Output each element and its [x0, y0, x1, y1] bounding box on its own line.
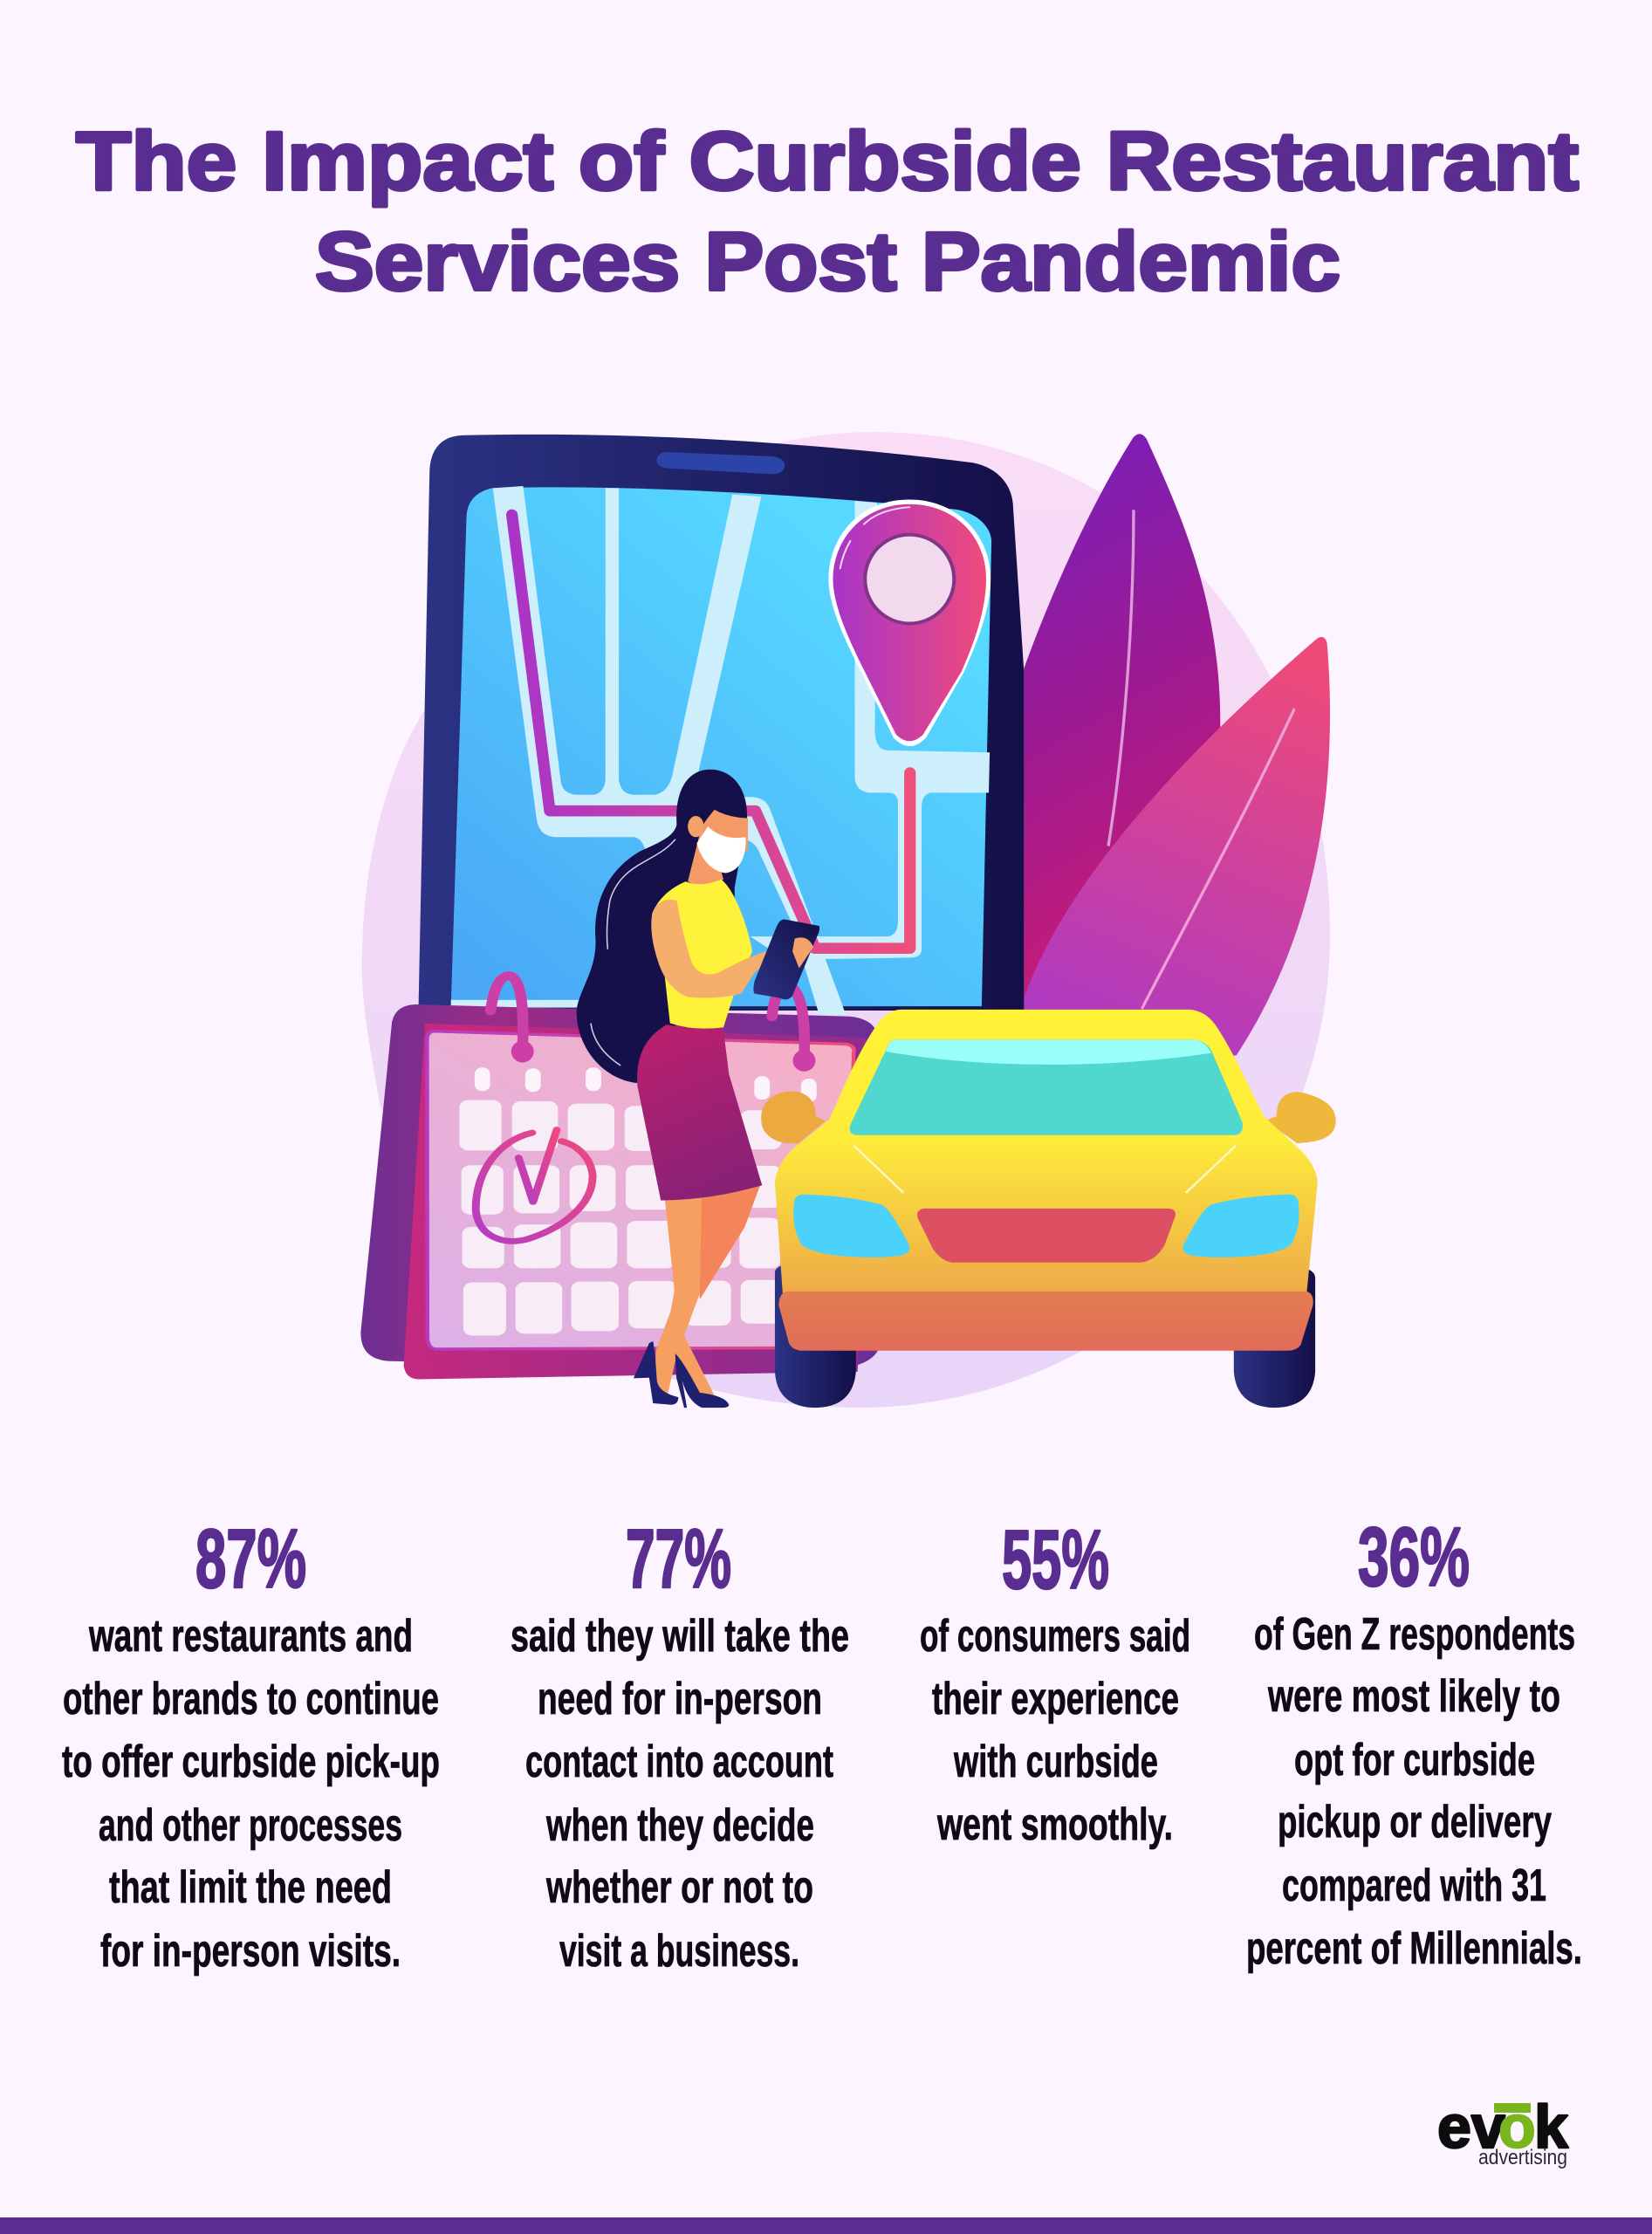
description	[62, 1611, 440, 1977]
windshield	[850, 1039, 1243, 1135]
description	[920, 1611, 1190, 1850]
skirt	[637, 1024, 762, 1201]
title	[76, 115, 1579, 308]
stat: 55%	[920, 1513, 1190, 1850]
left mirror	[761, 1091, 826, 1143]
check mark in circle	[476, 1130, 593, 1241]
logo wordmark: o	[1498, 2093, 1536, 2161]
windshield highlight	[886, 1039, 1211, 1065]
stat: 36%	[1246, 1511, 1582, 1974]
purple leaf	[1024, 434, 1222, 1011]
pink leaf vein	[1141, 709, 1294, 1009]
number 36%: 36%	[1358, 1511, 1470, 1604]
number 87%: 87%	[195, 1512, 306, 1606]
bottom bar	[0, 2217, 1652, 2234]
car body	[775, 1010, 1318, 1293]
hair, face, torso	[577, 770, 819, 1083]
right wheel	[1234, 1270, 1315, 1408]
description: when they decide	[545, 1800, 814, 1851]
tablet body	[418, 435, 1024, 1011]
calendar binding holes	[475, 1067, 817, 1102]
description: to offer curbside pick-up	[62, 1737, 440, 1787]
description: whether or not to	[545, 1862, 813, 1913]
ear	[688, 816, 704, 837]
left headlight	[793, 1195, 909, 1257]
skirt, legs, shoes	[634, 1024, 762, 1408]
background blob	[362, 432, 1330, 1408]
logo: evok advertising	[1437, 2093, 1568, 2169]
description: opt for curbside	[1294, 1735, 1535, 1785]
title: Services Post Pandemic	[315, 216, 1340, 308]
location pin	[828, 499, 991, 746]
grille	[917, 1209, 1176, 1263]
description: visit a business.	[559, 1926, 799, 1977]
right headlight	[1182, 1195, 1299, 1257]
right mirror	[1265, 1092, 1336, 1143]
hair	[577, 770, 747, 1083]
title: The Impact of Curbside Restaurant	[76, 115, 1579, 208]
description: want restaurants and	[88, 1611, 413, 1662]
tablet screen	[451, 487, 991, 1006]
woman with mask holding phone	[577, 770, 819, 1408]
pink leaf	[1024, 637, 1330, 1055]
calendar page	[427, 1031, 854, 1349]
calendar frame	[404, 1024, 877, 1379]
legs	[655, 1197, 716, 1401]
face and neck	[688, 810, 748, 885]
description: their experience	[932, 1674, 1179, 1724]
description: need for in-person	[538, 1674, 822, 1724]
description	[1246, 1609, 1582, 1974]
logo bar over o	[1494, 2103, 1531, 2113]
bumper	[778, 1292, 1313, 1351]
stat: 77%	[511, 1512, 849, 1977]
logo wordmark: k	[1534, 2093, 1568, 2161]
description: said they will take the	[511, 1611, 849, 1662]
calendar date cells	[459, 1100, 782, 1335]
hood lines	[854, 1146, 1236, 1193]
calendar	[360, 976, 878, 1379]
description: for in-person visits.	[100, 1926, 401, 1977]
logo wordmark: ev	[1437, 2093, 1505, 2161]
logo subtitle: advertising	[1478, 2146, 1567, 2169]
handheld phone	[753, 920, 819, 999]
number 77%: 77%	[626, 1512, 731, 1606]
description: with curbside	[953, 1737, 1158, 1787]
calendar ring knobs	[511, 1041, 815, 1072]
tablet map	[418, 435, 1024, 1015]
back leg	[696, 1185, 760, 1299]
tablet notch	[656, 452, 785, 474]
left shoe	[634, 1341, 678, 1405]
face mask	[696, 826, 746, 873]
stat: 87%	[62, 1512, 440, 1977]
leaves	[1024, 434, 1330, 1055]
right shoe	[675, 1353, 729, 1408]
description: other brands to continue	[63, 1674, 439, 1724]
calendar rings	[490, 976, 805, 1059]
left wheel	[775, 1265, 856, 1408]
description: of consumers said	[920, 1611, 1190, 1662]
purple leaf vein	[1108, 510, 1134, 846]
description: and other processes	[99, 1800, 402, 1851]
calendar back board	[360, 1004, 878, 1368]
arm	[651, 900, 771, 998]
hand	[792, 937, 813, 968]
description	[511, 1611, 849, 1977]
yellow car	[761, 1010, 1336, 1408]
map roads	[451, 486, 990, 1015]
description: that limit the need	[109, 1862, 392, 1913]
hair highlights	[591, 839, 675, 1066]
description: contact into account	[525, 1737, 833, 1787]
description: went smoothly.	[936, 1799, 1173, 1850]
route line	[512, 515, 910, 949]
number 55%: 55%	[1002, 1513, 1109, 1607]
illustration: curbside pickup scene	[360, 432, 1336, 1408]
yellow top	[652, 880, 752, 1029]
